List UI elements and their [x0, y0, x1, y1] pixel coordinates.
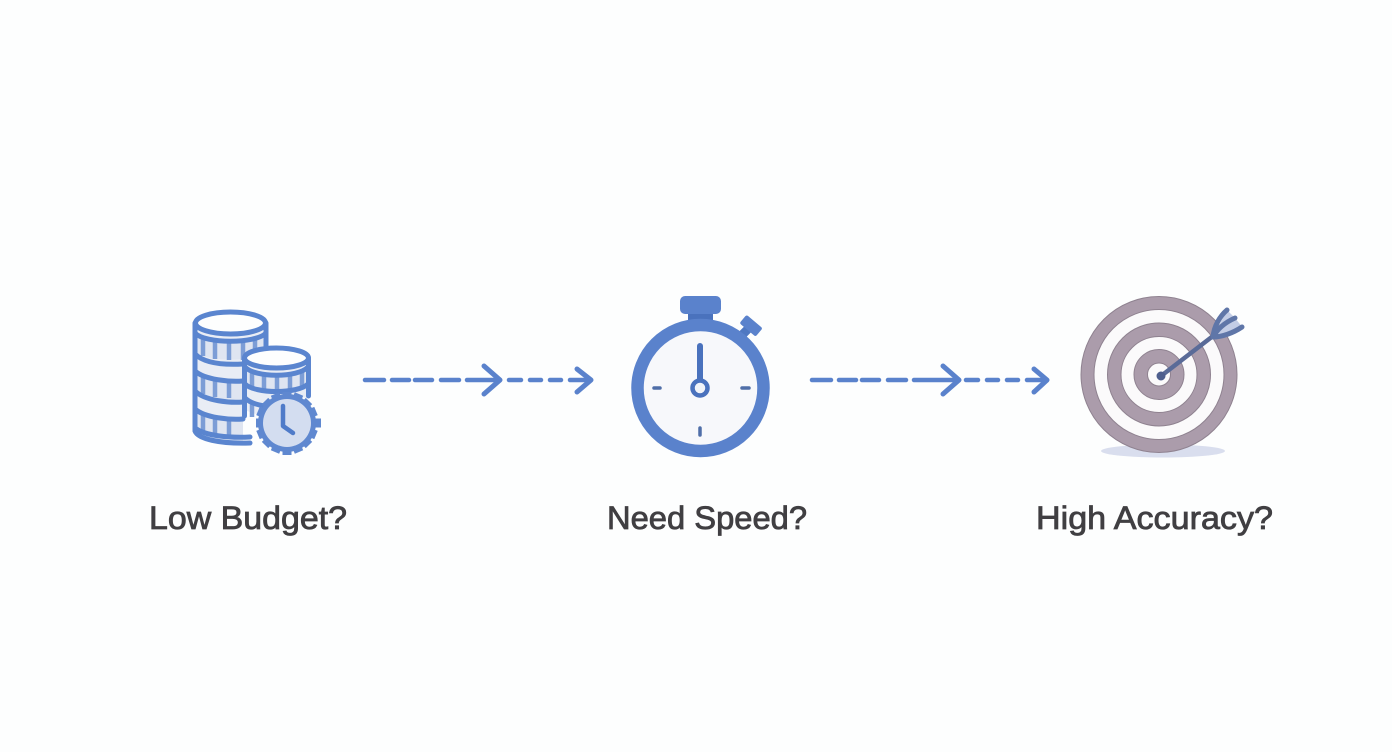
arrow: budget to speed: [365, 366, 591, 394]
small coin stack: [244, 348, 309, 417]
large coin stack: [194, 312, 267, 443]
clock gear badge: [256, 392, 321, 455]
arrow: speed to accuracy: [812, 366, 1047, 394]
side button: [739, 315, 763, 337]
target rings: [1081, 296, 1237, 452]
label: low budget: Low Budget?: [149, 500, 347, 536]
label: need speed: Need Speed?: [607, 500, 807, 536]
icon: stopwatch: [638, 296, 764, 451]
label: high accuracy: High Accuracy?: [1036, 500, 1273, 536]
icon: coin stacks with clock: [194, 312, 321, 455]
top button: [680, 296, 721, 323]
watch body: [638, 325, 764, 451]
dart: [1157, 310, 1243, 380]
icon: target with arrow: [1081, 296, 1243, 458]
target shadow: [1101, 444, 1225, 458]
watch hand: [692, 346, 708, 396]
tick marks: [654, 388, 749, 435]
